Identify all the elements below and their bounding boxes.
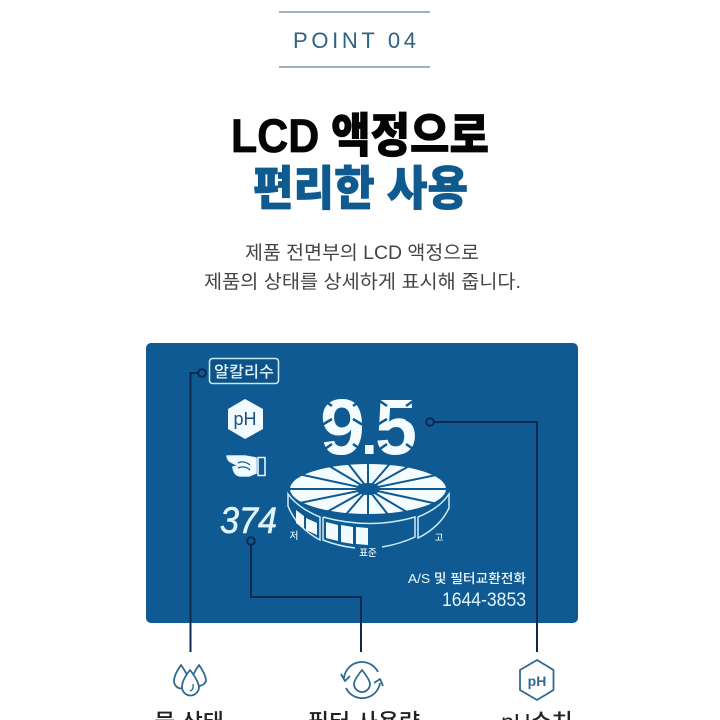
pH value: 9 <box>320 382 365 471</box>
description <box>204 242 521 293</box>
point badge: POINT 04 <box>293 28 416 53</box>
pH value <box>320 382 417 471</box>
scale labels: 표준 <box>359 548 377 559</box>
label: alkaline <box>210 358 278 384</box>
gauge disc <box>285 459 451 559</box>
service phone caption: A/S 및 필터교환전화 <box>408 571 526 586</box>
description: 제품 전면부의 LCD 액정으로 <box>245 242 479 264</box>
disc side outlines <box>288 494 449 548</box>
title line 1: LCD 액정으로 <box>231 109 489 162</box>
icon: pH outline hexagon <box>520 660 554 700</box>
description: 제품의 상태를 상세하게 표시해 줍니다. <box>204 271 521 293</box>
icon: pH hexagon <box>228 399 263 439</box>
icon: filter cycle <box>341 662 383 698</box>
service phone number: 1644-3853 <box>442 590 526 611</box>
icon: water drops <box>174 665 206 696</box>
scale labels <box>290 531 444 559</box>
icon: pH outline hexagon: pH <box>528 673 546 689</box>
connector: pH value <box>426 418 537 652</box>
connector: filter usage <box>247 537 361 652</box>
title line 2: 편리한 사용 <box>253 162 468 215</box>
panel: LCD display <box>146 343 578 623</box>
scale labels: 고 <box>435 533 444 544</box>
pH value: . <box>361 400 378 467</box>
disc top <box>285 459 451 519</box>
icon: pH hexagon: pH <box>233 409 257 429</box>
icon: pointing hand <box>227 456 265 476</box>
label: alkaline: 알칼리수 <box>214 363 274 381</box>
filter usage value: 374 <box>220 500 277 541</box>
connector: water state <box>190 369 206 652</box>
pH value: 5 <box>375 382 417 471</box>
disc level cells <box>296 510 368 545</box>
scale labels: 저 <box>290 531 298 542</box>
